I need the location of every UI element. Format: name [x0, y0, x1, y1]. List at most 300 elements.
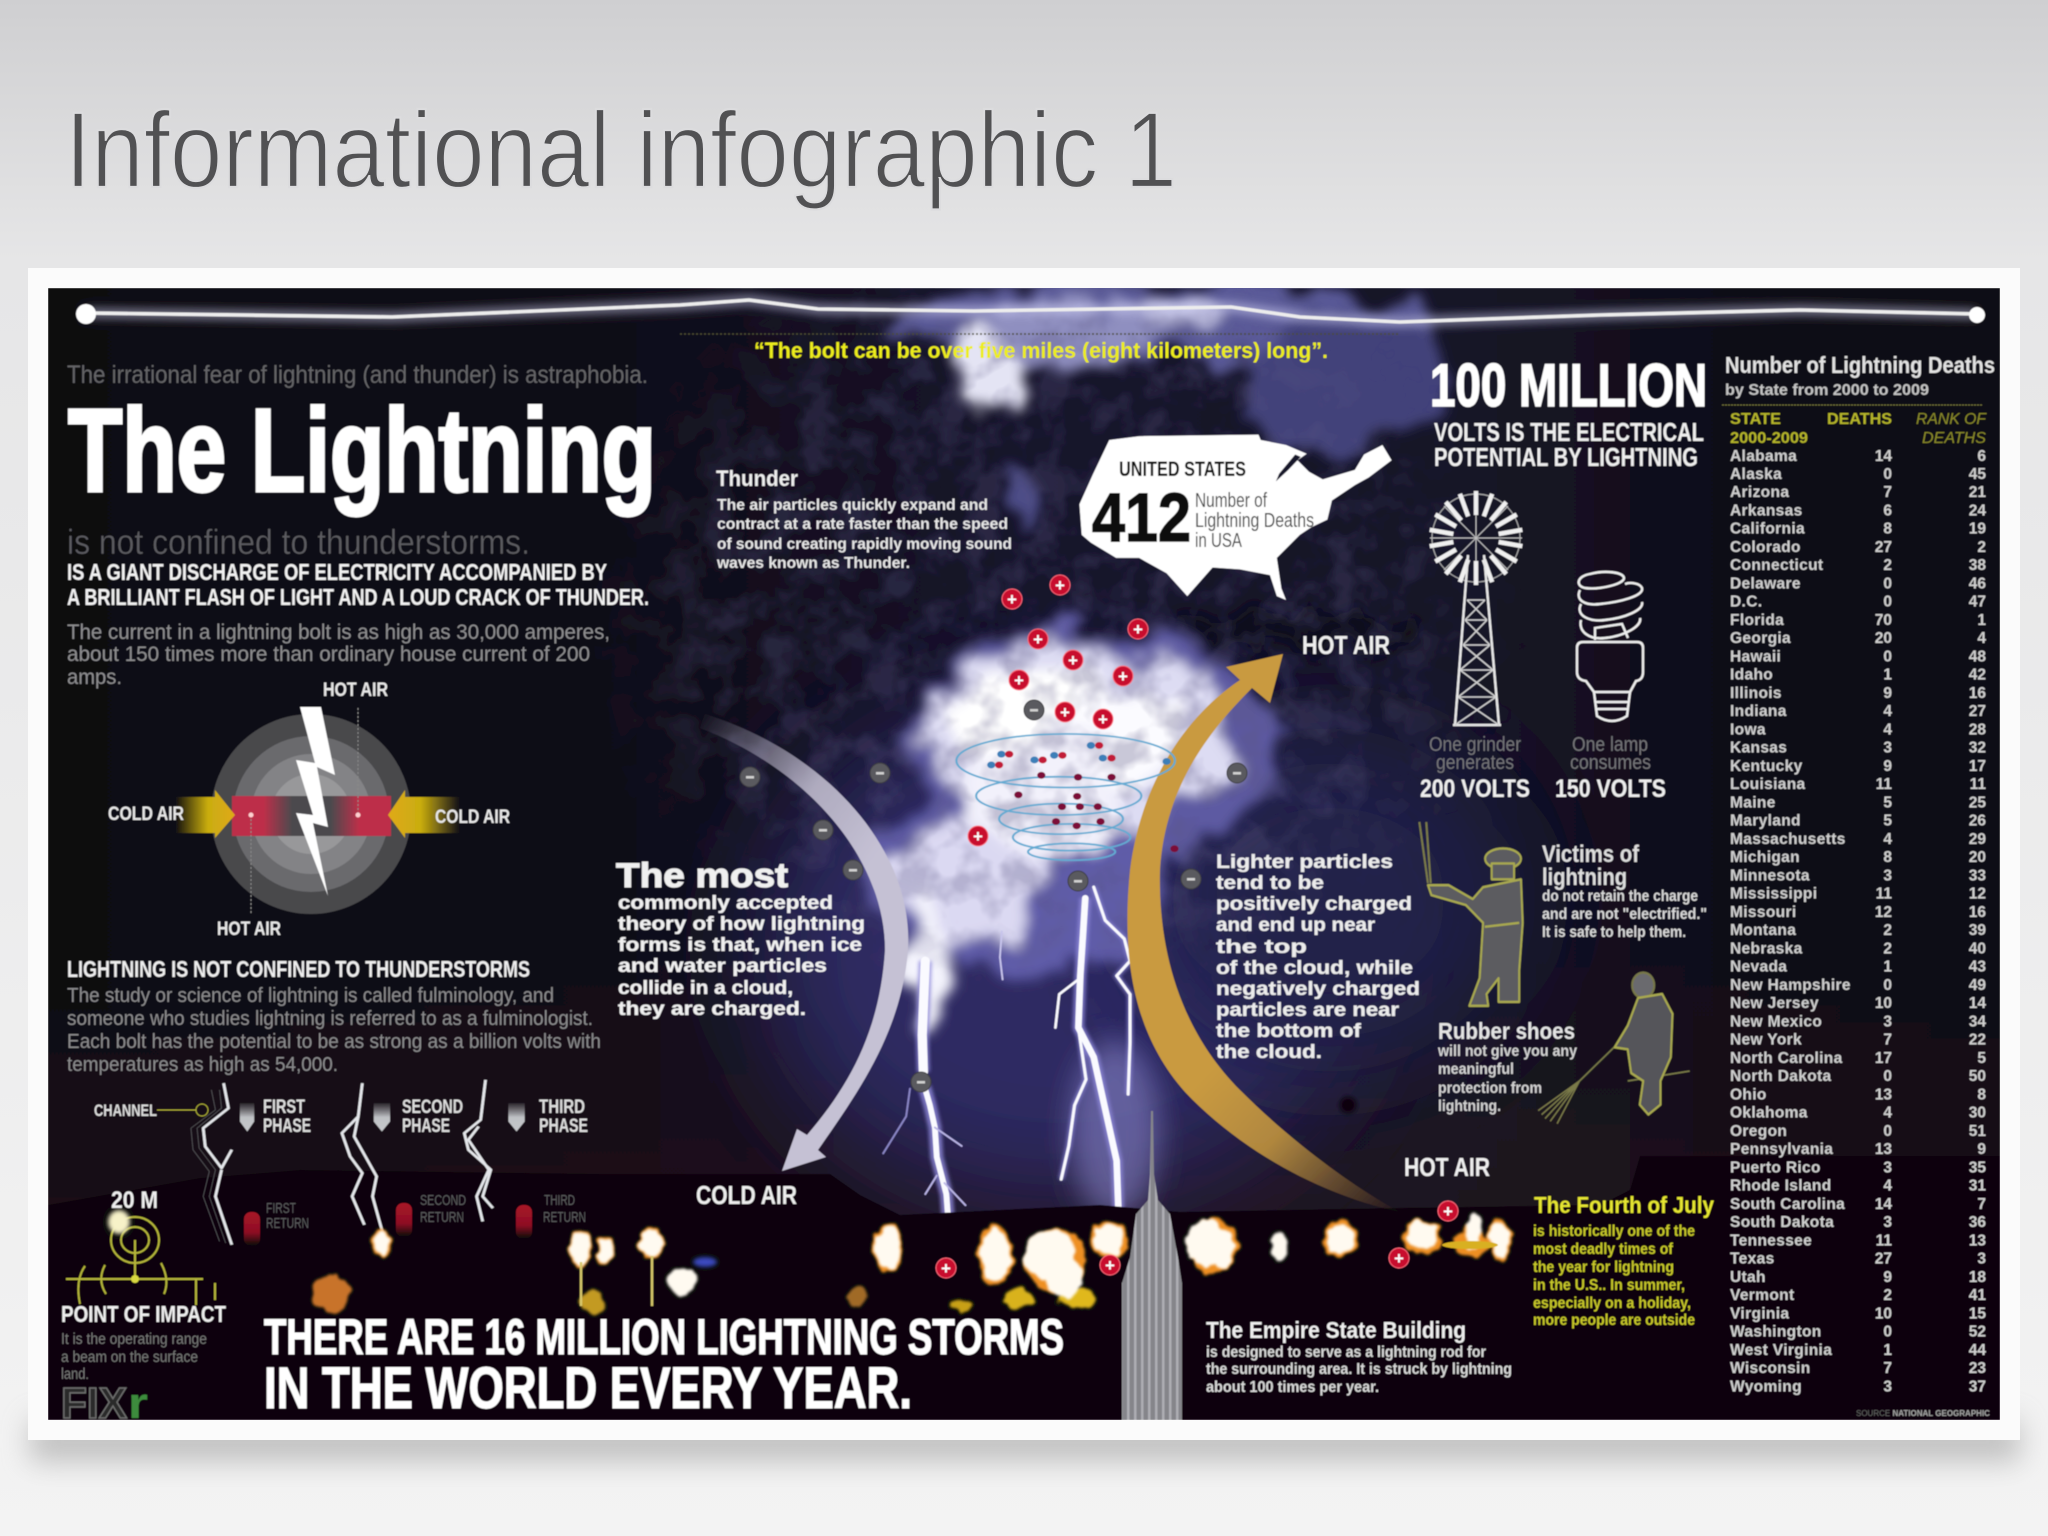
deaths by state table: 2: [1883, 940, 1892, 958]
rubber shoes text: protection from: [1438, 1080, 1542, 1097]
deaths by state table: 27: [1875, 539, 1892, 556]
deaths by state table: 7: [1883, 1360, 1892, 1377]
deaths by state table: 13: [1969, 1232, 1986, 1250]
deaths by state table: 0: [1883, 977, 1892, 994]
deaths by state table: Arkansas: [1730, 502, 1803, 520]
the most text: forms is that, when ice: [618, 935, 862, 956]
victims text: lightning: [1542, 864, 1627, 891]
deaths by state table: Connecticut: [1730, 557, 1823, 574]
empire state building: [1122, 1111, 1182, 1420]
deaths by state table: 3: [1883, 1378, 1892, 1396]
deaths by state table: Vermont: [1730, 1287, 1794, 1304]
deaths by state table: D.C.: [1730, 594, 1762, 611]
left intro block: IS A GIANT DISCHARGE OF ELECTRICITY ACCOMPANIED BY: [67, 559, 607, 585]
deaths by state table: 0: [1883, 576, 1892, 592]
deaths by state table: Texas: [1730, 1251, 1775, 1268]
swirl: [956, 734, 1175, 860]
deaths by state table: Nebraska: [1730, 940, 1803, 958]
deaths by state table: 24: [1969, 502, 1986, 520]
air convection diagram: COLD AIR: [435, 807, 510, 828]
deaths by state table: 4: [1883, 831, 1892, 848]
label: hot air bottom: HOT AIR: [1404, 1152, 1490, 1182]
100 million volts text: POTENTIAL BY LIGHTNING: [1434, 442, 1698, 472]
plus signs: +: [1033, 630, 1043, 649]
deaths by state table: 3: [1883, 1014, 1892, 1030]
fixr logo: FIX: [61, 1379, 127, 1428]
rubber shoes text: will not give you any: [1437, 1043, 1577, 1060]
deaths by state table: Alaska: [1730, 466, 1782, 483]
deaths by state table: Washington: [1730, 1324, 1822, 1341]
deaths by state table: 29: [1969, 831, 1986, 848]
deaths table heading: [1722, 352, 1995, 447]
white picture frame: [28, 268, 2020, 1440]
deaths by state table: Wisconsin: [1730, 1360, 1811, 1377]
deaths by state table: 45: [1969, 466, 1986, 483]
volts comparison text: One grinder: [1429, 734, 1521, 756]
label: hot air top: HOT AIR: [1302, 630, 1390, 660]
deaths by state table: 0: [1883, 594, 1892, 611]
deaths by state table: 41: [1969, 1287, 1986, 1304]
point of impact radar: It is the operating range: [61, 1331, 207, 1348]
left intro block: The irrational fear of lightning (and thunder) is astraphobia.: [67, 361, 648, 389]
empire state text: about 100 times per year.: [1206, 1379, 1379, 1396]
deaths by state table: Virginia: [1730, 1306, 1789, 1322]
deaths by state table: 36: [1969, 1214, 1986, 1231]
deaths by state table: 4: [1883, 722, 1892, 738]
left intro block: The Lightning: [68, 385, 656, 517]
deaths by state table: North Dakota: [1730, 1068, 1832, 1085]
deaths by state table: 2: [1977, 539, 1986, 556]
deaths by state table: 20: [1969, 849, 1986, 866]
deaths by state table: 0: [1883, 466, 1892, 483]
victims text: Victims of: [1542, 841, 1640, 868]
deaths by state table: 3: [1883, 1160, 1892, 1176]
deaths by state table: 10: [1875, 995, 1892, 1012]
deaths by state table: 27: [1875, 1251, 1892, 1268]
point of impact radar: POINT OF IMPACT: [61, 1301, 226, 1327]
deaths by state table: 37: [1969, 1378, 1986, 1396]
deaths by state table: 4: [1883, 1105, 1892, 1122]
deaths by state table: 21: [1969, 484, 1986, 501]
volts comparison text: consumes: [1570, 752, 1651, 774]
lighter particles text: of the cloud, while: [1216, 958, 1413, 979]
icon: windmill: [1430, 491, 1522, 725]
deaths by state table: 0: [1883, 648, 1892, 666]
deaths by state table: 4: [1883, 703, 1892, 720]
deaths by state table: 43: [1969, 959, 1986, 976]
deaths by state table: 47: [1969, 594, 1986, 611]
fixr logo: r: [128, 1379, 148, 1428]
deaths by state table: 13: [1875, 1141, 1892, 1158]
lighter particles text: Lighter particles: [1216, 852, 1393, 873]
lighter particles text: the cloud.: [1216, 1042, 1322, 1063]
plus signs: +: [1118, 667, 1128, 686]
16 million storms headline: THERE ARE 16 MILLION LIGHTNING STORMS: [264, 1309, 1064, 1365]
deaths by state table: 52: [1969, 1324, 1986, 1341]
deaths by state table: Colorado: [1730, 539, 1801, 556]
arrow: cold air: [700, 714, 908, 1171]
icon: light bulb: [1577, 572, 1643, 721]
deaths by state table: 14: [1875, 448, 1892, 465]
fulminology text: [67, 956, 601, 1076]
deaths by state table: [1730, 448, 1986, 1396]
deaths by state table: Tennessee: [1730, 1232, 1812, 1250]
lightning phases diagram: PHASE: [402, 1116, 450, 1137]
city silhouette: [48, 1156, 2000, 1420]
100 million volts text: VOLTS IS THE ELECTRICAL: [1434, 417, 1704, 447]
left intro block: is not confined to thunderstorms.: [67, 523, 530, 562]
the most text: [616, 857, 865, 1020]
left intro block: The current in a lightning bolt is as high as 30,000 amperes,: [67, 621, 610, 644]
plus signs: +: [973, 827, 983, 846]
deaths by state table: New York: [1730, 1032, 1802, 1049]
deaths by state table: 16: [1969, 685, 1986, 702]
deaths by state table: 42: [1969, 667, 1986, 684]
deaths by state table: 17: [1875, 1050, 1892, 1067]
dark particle: [1340, 1097, 1356, 1113]
lightning phases diagram: THIRD: [539, 1097, 585, 1118]
infographic panel: [48, 280, 2000, 1428]
volts comparison text: 150 VOLTS: [1555, 775, 1666, 803]
victims text: [1542, 841, 1707, 941]
ice and water particles: [987, 742, 1179, 852]
fourth of july text: in the U.S.. In summer,: [1533, 1277, 1685, 1294]
deaths by state table: North Carolina: [1730, 1050, 1843, 1067]
positive charges: [936, 575, 1458, 1278]
charge particles cloud: [956, 734, 1179, 860]
plus signs: [941, 576, 1453, 1278]
lightning phases diagram: PHASE: [263, 1116, 311, 1137]
deaths by state table: South Dakota: [1730, 1214, 1834, 1231]
fourth of july text: most deadly times of: [1533, 1241, 1674, 1258]
deaths by state table: 7: [1883, 484, 1892, 501]
lighter particles text: particles are near: [1216, 1000, 1400, 1021]
cloud mottling: [650, 280, 1450, 960]
fourth of july text: especially on a holiday,: [1533, 1295, 1691, 1312]
deaths by state table: 46: [1969, 576, 1986, 592]
deaths by state table: Nevada: [1730, 959, 1787, 976]
rubber shoes text: lightning.: [1438, 1098, 1501, 1115]
deaths by state table: 32: [1969, 740, 1986, 757]
deaths by state table: Arizona: [1730, 484, 1789, 501]
victims text: and are not "electrified.": [1542, 906, 1707, 923]
deaths by state table: 28: [1969, 722, 1986, 738]
left intro block: [67, 361, 656, 689]
thunder text: Thunder: [716, 466, 798, 491]
plus signs: +: [1105, 1256, 1115, 1275]
deaths by state table: 1: [1977, 612, 1986, 629]
thunder text: contract at a rate faster than the speed: [717, 516, 1008, 533]
map of united states: Number of: [1195, 490, 1267, 512]
bolt glow halo: [922, 887, 1130, 1220]
deaths by state table: 12: [1875, 904, 1892, 921]
deaths table heading: DEATHS: [1827, 411, 1892, 428]
deaths by state table: Oregon: [1730, 1123, 1787, 1140]
volts comparison text: [1420, 734, 1666, 803]
left intro block: about 150 times more than ordinary house current of 200: [67, 643, 590, 666]
deaths by state table: 8: [1977, 1086, 1986, 1104]
deaths by state table: South Carolina: [1730, 1196, 1845, 1213]
lightning phases diagram: PHASE: [539, 1116, 588, 1137]
deaths by state table: 6: [1883, 502, 1892, 520]
deaths by state table: 3: [1977, 1251, 1986, 1268]
top lightning bolt ruler: [76, 300, 1985, 334]
the most text: and water particles: [618, 956, 827, 977]
map of united states: UNITED STATES: [1119, 458, 1246, 481]
deaths table heading: Number of Lightning Deaths: [1725, 352, 1995, 378]
volts comparison text: One lamp: [1572, 734, 1648, 756]
deaths by state table: 38: [1969, 557, 1986, 574]
empire state text: The Empire State Building: [1206, 1317, 1466, 1343]
deaths by state table: Wyoming: [1730, 1378, 1802, 1396]
rubber shoes text: meaningful: [1438, 1061, 1514, 1078]
deaths by state table: 9: [1977, 1141, 1986, 1158]
plus signs: +: [1098, 710, 1108, 729]
deaths by state table: 35: [1969, 1160, 1986, 1176]
deaths by state table: 13: [1875, 1086, 1892, 1104]
lighter particles text: the bottom of: [1216, 1021, 1362, 1042]
map of united states: 412: [1092, 479, 1191, 556]
lightning phases diagram: SECOND: [402, 1097, 463, 1118]
deaths by state table: Michigan: [1730, 849, 1800, 866]
fulminology text: Each bolt has the potential to be as strong as a billion volts with: [67, 1030, 601, 1053]
deaths table heading: by State from 2000 to 2009: [1725, 382, 1929, 399]
deaths by state table: 9: [1883, 1269, 1892, 1286]
deaths by state table: 10: [1875, 1306, 1892, 1322]
deaths by state table: Utah: [1730, 1269, 1766, 1286]
plus signs: +: [1007, 590, 1017, 609]
deaths by state table: Missouri: [1730, 904, 1797, 921]
left intro block: A BRILLIANT FLASH OF LIGHT AND A LOUD CRACK OF THUNDER.: [67, 584, 649, 610]
deaths by state table: Indiana: [1730, 703, 1787, 720]
air convection diagram: HOT AIR: [323, 680, 388, 701]
thunder text: of sound creating rapidly moving sound: [717, 536, 1012, 553]
air convection diagram: COLD AIR: [108, 804, 184, 825]
deaths table heading: 2000-2009: [1730, 430, 1808, 447]
deaths by state table: Pennsylvania: [1730, 1141, 1833, 1158]
deaths by state table: 7: [1883, 1032, 1892, 1049]
the most text: The most: [616, 857, 788, 895]
deaths by state table: Massachusetts: [1730, 831, 1846, 848]
deaths by state table: 11: [1876, 776, 1892, 793]
deaths by state table: West Virginia: [1730, 1342, 1832, 1359]
lightning phases diagram: FIRST: [263, 1097, 305, 1118]
lower bolt glow: [1070, 1040, 1160, 1220]
deaths by state table: 30: [1969, 1105, 1986, 1122]
deaths by state table: 44: [1969, 1342, 1986, 1359]
lighter particles text: and end up near: [1216, 915, 1376, 936]
deaths by state table: 5: [1883, 794, 1892, 812]
fulminology text: someone who studies lightning is referred to as a fulminologist.: [67, 1007, 593, 1030]
deaths by state table: 1: [1883, 1342, 1892, 1359]
point of impact radar: land.: [61, 1366, 89, 1383]
lightning phases diagram: [94, 1080, 588, 1246]
deaths by state table: 2: [1883, 1287, 1892, 1304]
fulminology text: The study or science of lightning is called fulminology, and: [67, 984, 554, 1007]
source credit: SOURCE NATIONAL GEOGRAPHIC: [1856, 1409, 1990, 1418]
left intro block: amps.: [67, 666, 122, 689]
deaths by state table: Maine: [1730, 794, 1776, 812]
deaths by state table: 51: [1969, 1123, 1986, 1140]
deaths by state table: 27: [1969, 703, 1986, 720]
deaths by state table: 2: [1883, 922, 1892, 939]
deaths by state table: 12: [1969, 886, 1986, 903]
deaths by state table: Rhode Island: [1730, 1178, 1832, 1195]
slide title: Informational infographic 1: [65, 89, 1177, 210]
plus signs: +: [1068, 651, 1078, 670]
lighter particles text: negatively charged: [1216, 979, 1420, 1000]
storm clouds: [870, 284, 1445, 1030]
point of impact radar: [61, 1187, 226, 1383]
the most text: collide in a cloud,: [618, 978, 793, 999]
deaths by state table: New Hampshire: [1730, 977, 1851, 994]
deaths by state table: Minnesota: [1730, 868, 1810, 884]
map of united states: in USA: [1195, 530, 1242, 552]
frame shadow: [30, 1420, 2020, 1462]
lighter particles text: [1216, 852, 1420, 1063]
deaths by state table: 7: [1977, 1196, 1986, 1213]
arrow: hot air: [1127, 654, 1400, 1212]
city lights: [310, 1214, 1511, 1315]
deaths by state table: 11: [1970, 776, 1986, 793]
deaths by state table: Louisiana: [1730, 776, 1806, 793]
map of united states: Lightning Deaths: [1195, 510, 1314, 532]
deaths by state table: Georgia: [1730, 630, 1791, 647]
deaths by state table: 1: [1883, 667, 1892, 684]
deaths by state table: Kansas: [1730, 740, 1787, 757]
plus signs: +: [941, 1259, 951, 1278]
point of impact radar: a beam on the surface: [61, 1349, 198, 1366]
deaths by state table: 22: [1969, 1032, 1986, 1049]
deaths by state table: Montana: [1730, 922, 1796, 939]
deaths by state table: 4: [1977, 630, 1986, 647]
deaths by state table: 2: [1883, 557, 1892, 574]
lightning bolts over city: [883, 887, 1130, 1220]
deaths by state table: Kentucky: [1730, 758, 1803, 775]
minus signs: [746, 709, 1241, 1084]
deaths by state table: 70: [1875, 612, 1892, 629]
fourth of july text: The Fourth of July: [1534, 1192, 1714, 1218]
storm sky background: [48, 288, 2000, 1216]
deaths by state table: New Jersey: [1730, 995, 1819, 1012]
lightning phases diagram: SECOND: [420, 1192, 466, 1209]
deaths by state table: 19: [1969, 521, 1986, 538]
fulminology text: LIGHTNING IS NOT CONFINED TO THUNDERSTORMS: [67, 956, 530, 982]
deaths by state table: 0: [1883, 1123, 1892, 1140]
plus signs: +: [1060, 703, 1070, 722]
deaths by state table: 3: [1883, 868, 1892, 884]
lighter particles text: positively charged: [1216, 894, 1412, 915]
deaths by state table: 31: [1969, 1178, 1986, 1195]
air convection diagram: HOT AIR: [217, 919, 281, 940]
fourth of july text: more people are outside: [1533, 1312, 1695, 1329]
deaths by state table: 5: [1883, 813, 1892, 830]
fourth of july text: the year for lightning: [1533, 1259, 1674, 1276]
negative charges: [740, 700, 1247, 1092]
plus signs: +: [1133, 620, 1143, 639]
point of impact radar: 20 M: [111, 1187, 158, 1214]
deaths by state table: 14: [1875, 1196, 1892, 1213]
deaths by state table: 17: [1969, 758, 1986, 775]
empire state text: the surrounding area. It is struck by lightning: [1206, 1361, 1512, 1378]
thunder text: waves known as Thunder.: [716, 555, 910, 572]
deaths by state table: 18: [1969, 1269, 1986, 1286]
deaths by state table: Delaware: [1730, 576, 1801, 592]
deaths by state table: Ohio: [1730, 1086, 1767, 1104]
quote about bolt length: “The bolt can be over five miles (eight kilometers) long”.: [754, 338, 1328, 363]
deaths by state table: Puerto Rico: [1730, 1160, 1821, 1176]
deaths by state table: 39: [1969, 922, 1986, 939]
lightning phases diagram: FIRST: [266, 1200, 296, 1217]
lightning phases diagram: RETURN: [266, 1215, 309, 1232]
fourth of july text: is historically one of the: [1533, 1223, 1695, 1240]
deaths by state table: 26: [1969, 813, 1986, 830]
100 million volts text: 100 MILLION: [1430, 352, 1707, 419]
deaths by state table: 3: [1883, 740, 1892, 757]
deaths by state table: 9: [1883, 685, 1892, 702]
the most text: commonly accepted: [618, 893, 833, 914]
deaths by state table: Idaho: [1730, 667, 1773, 684]
the most text: they are charged.: [618, 999, 806, 1020]
map of united states: [1079, 435, 1392, 600]
fourth of july text: [1533, 1192, 1714, 1329]
blurred artwork wrapper: [48, 280, 2000, 1428]
16 million storms headline: [264, 1309, 1064, 1421]
rubber shoes text: Rubber shoes: [1438, 1018, 1575, 1044]
lightning phases diagram: CHANNEL: [94, 1101, 157, 1120]
lightning phases diagram: RETURN: [420, 1209, 464, 1226]
lighter particles text: tend to be: [1216, 873, 1324, 894]
fulminology text: temperatures as high as 54,000.: [67, 1053, 338, 1076]
label: cold air: COLD AIR: [696, 1180, 797, 1210]
deaths table heading: DEATHS: [1922, 430, 1986, 447]
plus signs: +: [1394, 1249, 1404, 1268]
deaths by state table: Iowa: [1730, 722, 1766, 738]
deaths by state table: 49: [1969, 977, 1986, 994]
deaths by state table: 11: [1876, 886, 1892, 903]
deaths by state table: Florida: [1730, 612, 1784, 629]
volts comparison text: 200 VOLTS: [1420, 775, 1530, 803]
16 million storms headline: IN THE WORLD EVERY YEAR.: [264, 1356, 912, 1421]
volts comparison text: generates: [1436, 752, 1514, 774]
rubber shoes text: [1437, 1018, 1577, 1115]
lightning phases diagram: RETURN: [543, 1209, 586, 1226]
100 million volts text: [1430, 352, 1707, 472]
plus signs: +: [1443, 1202, 1453, 1221]
deaths by state table: 5: [1977, 1050, 1986, 1067]
deaths by state table: Mississippi: [1730, 886, 1817, 903]
plus signs: +: [1014, 671, 1024, 690]
deaths by state table: Hawaii: [1730, 648, 1781, 666]
deaths by state table: 48: [1969, 648, 1986, 666]
figure: man with whip: [1419, 822, 1523, 1006]
thunder text: The air particles quickly expand and: [717, 497, 988, 514]
deaths by state table: Alabama: [1730, 448, 1797, 465]
deaths by state table: Oklahoma: [1730, 1105, 1808, 1122]
lighter particles text: the top: [1216, 937, 1307, 958]
deaths by state table: 16: [1969, 904, 1986, 921]
deaths by state table: 6: [1977, 448, 1986, 465]
lightning phases diagram: THIRD: [544, 1192, 575, 1209]
deaths by state table: Illinois: [1730, 685, 1782, 702]
deaths by state table: 25: [1969, 794, 1986, 812]
air convection diagram: [108, 680, 510, 940]
deaths by state table: 23: [1969, 1360, 1986, 1377]
deaths by state table: 8: [1883, 521, 1892, 538]
thunder text: [716, 466, 1012, 572]
deaths table heading: RANK OF: [1916, 411, 1987, 428]
deaths table heading: STATE: [1730, 411, 1781, 428]
